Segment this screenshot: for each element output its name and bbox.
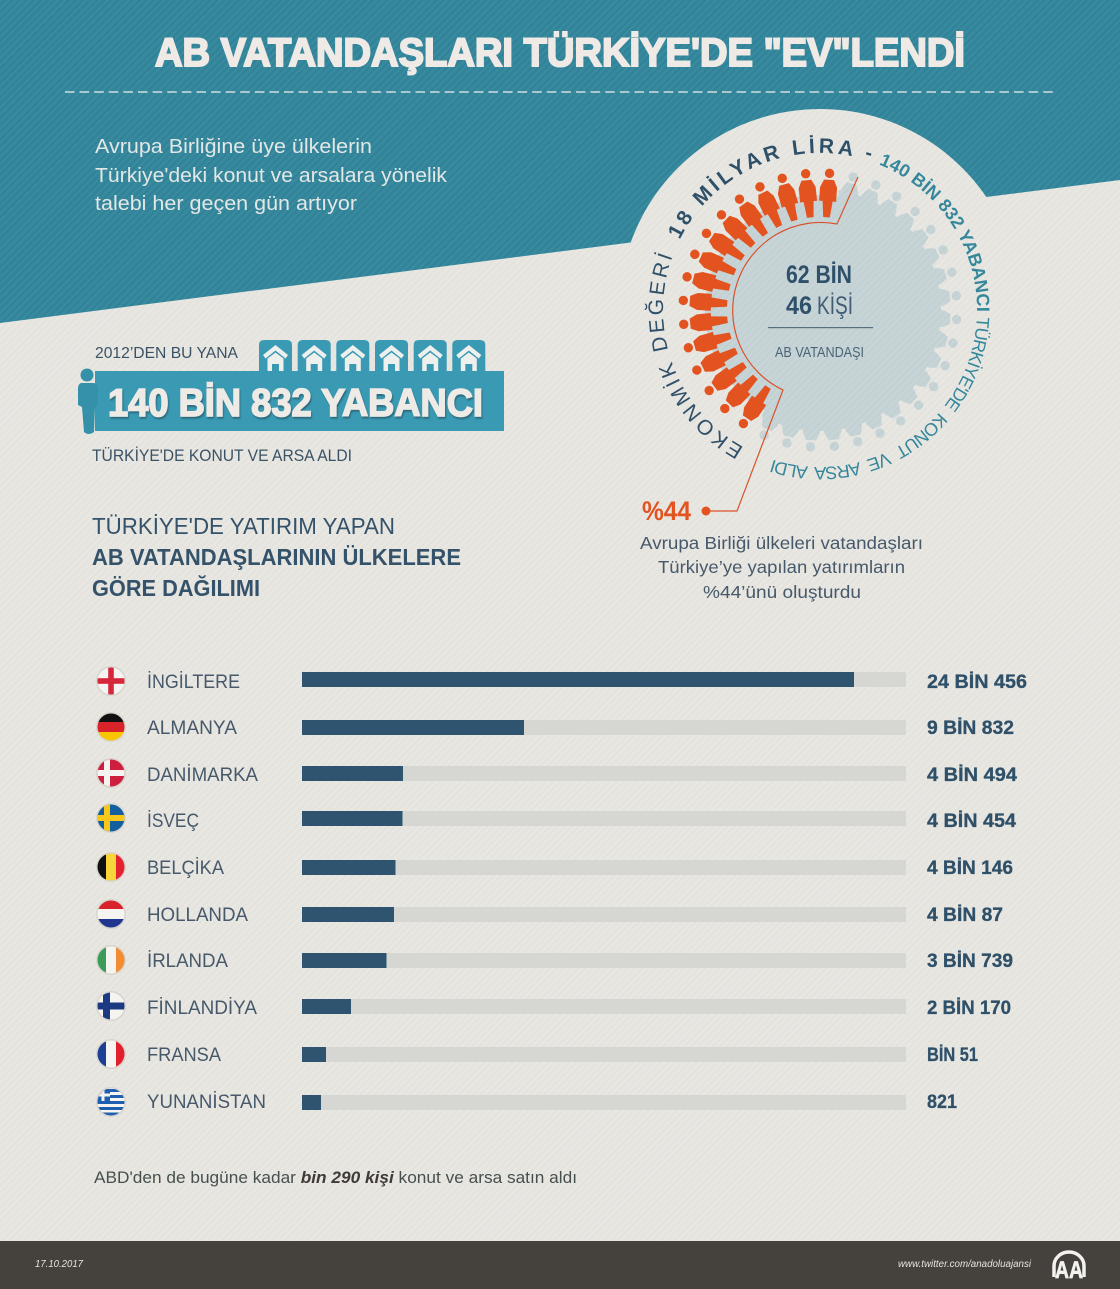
ring text: bought property: TÜRKİYE'DE KONUT VE ARSA ALDI <box>770 318 990 480</box>
banner number: 140 BİN 832 YABANCI <box>108 382 483 425</box>
section heading: TÜRKİYE'DE YATIRIM YAPAN <box>92 513 395 539</box>
ring text: 140 bin 832 foreigners: 140 BİN 832 YABANCI <box>880 154 990 311</box>
center count: 46 <box>786 292 812 320</box>
footer bar <box>0 1241 1120 1289</box>
logo: Anadolu Agency: AA <box>1055 1257 1083 1284</box>
intro text: Avrupa Birliğine üye ülkelerin <box>95 136 372 158</box>
ring text: 18 billion lira: 18 MİLYAR LİRA <box>669 135 852 239</box>
row: England: 24 BİN 456 <box>927 670 1027 693</box>
center count: KİŞİ <box>817 291 853 320</box>
row: England <box>96 666 1027 696</box>
callout: 44 percent: Türkiye’ye yapılan yatırımların <box>658 557 905 577</box>
banner bar <box>95 371 504 431</box>
icons: row of houses <box>259 340 485 371</box>
row: Greece: YUNANİSTAN <box>147 1090 266 1113</box>
callout: 44 percent: %44 <box>642 496 691 526</box>
label: bought property: TÜRKİYE'DE KONUT VE ARSA ALDI <box>92 446 352 465</box>
gear disc and gray people: other investors <box>705 170 962 452</box>
row: Sweden: 4 BİN 454 <box>927 809 1016 832</box>
panel: 140 bin 832 yabancı banner <box>78 340 504 465</box>
row: France <box>96 1039 978 1069</box>
intro text: talebi her geçen gün artıyor <box>95 193 357 215</box>
row: Germany <box>96 712 1014 742</box>
row: Greece <box>96 1087 957 1117</box>
row: Denmark: 4 BİN 494 <box>927 763 1017 786</box>
center count: 62 BİN <box>786 261 852 289</box>
icon: person <box>78 368 98 434</box>
row: England: İNGİLTERE <box>147 670 240 693</box>
row: Ireland <box>96 945 1013 975</box>
row: France: FRANSA <box>147 1044 221 1066</box>
row: Greece: 821 <box>927 1091 957 1113</box>
ring text: economic value: EKONMİK DEĞERİ <box>644 252 742 459</box>
label: since 2012: 2012’DEN BU YANA <box>95 345 238 362</box>
intro text: Türkiye'deki konut ve arsalara yönelik <box>95 165 448 187</box>
title: AB VATANDAŞLARI TÜRKİYE'DE "EV"LENDİ <box>155 30 965 75</box>
callout: 44 percent: %44’ünü oluşturdu <box>703 582 861 602</box>
row: Belgium <box>96 852 1013 882</box>
callout dot <box>702 506 710 516</box>
row: Netherlands <box>96 899 1003 929</box>
row: Netherlands: 4 BİN 87 <box>927 903 1003 926</box>
orange people: EU citizens 44 percent <box>678 168 838 432</box>
callout: 44 percent <box>640 496 923 602</box>
teal header band <box>0 0 1120 323</box>
row: Sweden: İSVEÇ <box>147 809 199 832</box>
ring dash: - <box>863 142 875 165</box>
center count: AB VATANDAŞI <box>775 344 864 361</box>
bar chart: distribution by country <box>96 666 1027 1117</box>
row: Finland: FİNLANDİYA <box>147 996 257 1019</box>
section heading: GÖRE DAĞILIMI <box>92 574 260 601</box>
row: Denmark: DANİMARKA <box>147 763 258 786</box>
callout line <box>706 177 858 511</box>
section heading: AB VATANDAŞLARININ ÜLKELERE <box>92 544 461 570</box>
row: Ireland: İRLANDA <box>147 949 228 972</box>
date: 17.10.2017 <box>35 1259 83 1270</box>
row: France: BİN 51 <box>927 1043 978 1066</box>
row: Belgium: 4 BİN 146 <box>927 856 1013 879</box>
row: Netherlands: HOLLANDA <box>147 904 248 926</box>
row: Finland <box>96 991 1011 1021</box>
row: Sweden <box>96 803 1016 833</box>
row: Ireland: 3 BİN 739 <box>927 949 1013 972</box>
row: Finland: 2 BİN 170 <box>927 996 1011 1019</box>
section heading <box>92 513 461 601</box>
intro text <box>95 136 448 215</box>
row: Germany: 9 BİN 832 <box>927 716 1014 739</box>
source url: www.twitter.com/anadoluajansi <box>898 1259 1032 1270</box>
footnote: ABD'den de bugüne kadar bin 290 kişi konut ve arsa satın aldı <box>94 1169 577 1187</box>
panel: circular people diagram <box>644 135 990 516</box>
row: Belgium: BELÇİKA <box>147 856 224 879</box>
callout: 44 percent: Avrupa Birliği ülkeleri vatandaşları <box>640 533 923 553</box>
row: Germany: ALMANYA <box>147 717 237 739</box>
row: Denmark <box>96 758 1017 788</box>
center count <box>768 261 873 361</box>
